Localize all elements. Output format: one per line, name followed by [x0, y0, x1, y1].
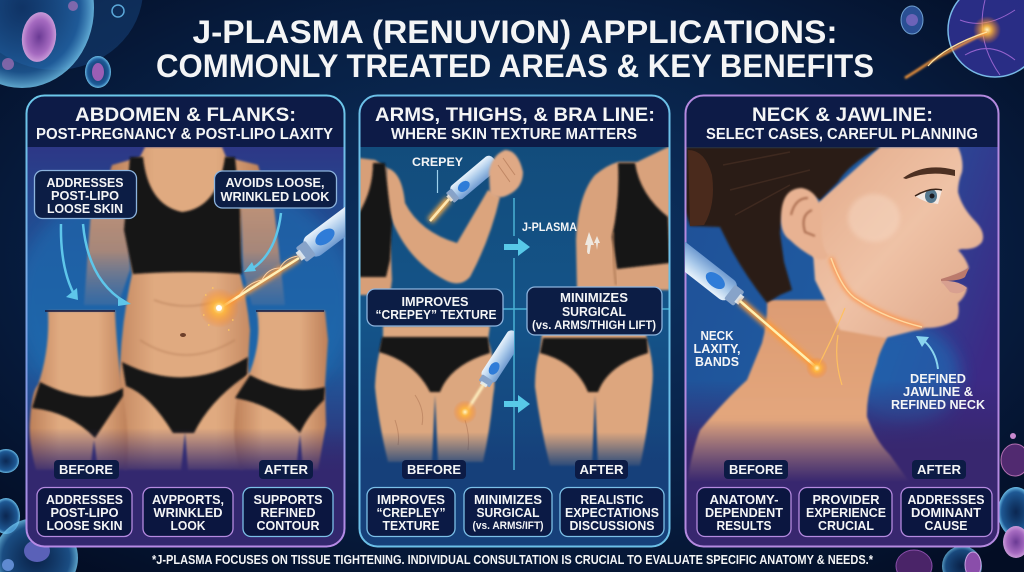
benefit: minimizes surgical: MINIMIZES: [474, 492, 542, 507]
after label: AFTER: [917, 462, 962, 477]
j-plasma label: J-PLASMA: [522, 222, 577, 234]
benefit: realistic expectations discussions: EXPECTATIONS: [565, 505, 659, 520]
title: J-PLASMA (RENUVION) APPLICATIONS:: [192, 14, 838, 50]
benefit: addresses dominant cause: CAUSE: [924, 518, 968, 533]
panel 1 heading: ABDOMEN & FLANKS:: [75, 104, 296, 126]
callout: addresses post-lipo loose skin: POST-LIPO: [51, 188, 119, 203]
callout: improves crepey texture: [367, 289, 503, 326]
benefit: minimizes surgical: [464, 488, 552, 536]
benefit: avpports wrinkled look: AVPPORTS,: [152, 492, 224, 507]
benefit: anatomy-dependent results: [697, 488, 791, 536]
benefit: provider experience crucial: EXPERIENCE: [806, 505, 886, 520]
callout: avoids loose wrinkled look: [214, 171, 336, 208]
callout: improves crepey texture: “CREPEY” TEXTURE: [376, 307, 497, 322]
decorative cells: top right with plasma flare: [901, 0, 1024, 78]
benefit: provider experience crucial: [799, 488, 892, 536]
before label: [402, 460, 466, 479]
title: COMMONLY TREATED AREAS & KEY BENEFITS: [156, 48, 874, 84]
panel 2 heading: ARMS, THIGHS, & BRA LINE:: [375, 104, 655, 126]
benefit: anatomy-dependent results: RESULTS: [716, 518, 772, 533]
after label: AFTER: [264, 462, 309, 477]
panel 3 heading: NECK & JAWLINE:: [752, 104, 933, 126]
callout: addresses post-lipo loose skin: ADDRESSES: [46, 175, 124, 190]
callout: improves crepey texture: IMPROVES: [402, 294, 469, 309]
panel 1 border: [26, 96, 344, 546]
benefit: addresses dominant cause: ADDRESSES: [908, 492, 985, 507]
panel: arms, thighs and bra line: [359, 95, 670, 547]
callout: minimizes surgical: [527, 287, 662, 335]
benefit: provider experience crucial: PROVIDER: [812, 492, 880, 507]
benefit: addresses dominant cause: DOMINANT: [911, 505, 981, 520]
up arrows on right arm: [585, 232, 600, 254]
defined jawline label: DEFINED: [910, 372, 966, 386]
benefit: realistic expectations discussions: DISCUSSIONS: [570, 518, 655, 533]
benefit: avpports wrinkled look: WRINKLED: [154, 505, 222, 520]
benefit: anatomy-dependent results: DEPENDENT: [705, 505, 783, 520]
icon: plasma wand with spark on abdomen: [200, 207, 345, 331]
benefit: avpports wrinkled look: LOOK: [170, 518, 206, 533]
after label: [912, 460, 966, 479]
arrow to jawline: [916, 336, 938, 369]
benefit: addresses dominant cause: [901, 488, 992, 536]
benefit: improves crepley texture: “CREPLEY”: [376, 505, 446, 520]
icon: wand on arm and fist: [430, 150, 523, 221]
benefit: provider experience crucial: CRUCIAL: [818, 518, 874, 533]
panel 1 illustration: [15, 95, 355, 547]
icon: wand on thigh: [454, 330, 514, 423]
panel 2 border: [360, 96, 670, 546]
panel 1 heading: POST-PREGNANCY & POST-LIPO LAXITY: [36, 126, 333, 143]
before label: BEFORE: [729, 462, 783, 477]
after label: [575, 460, 628, 479]
benefit: addresses post-lipo loose skin: ADDRESSES: [46, 492, 123, 507]
callout: avoids loose wrinkled look: AVOIDS LOOSE,: [226, 175, 324, 190]
panel 3 heading: SELECT CASES, CAREFUL PLANNING: [706, 126, 978, 143]
panel 1 heading: [36, 104, 333, 143]
before label: BEFORE: [59, 462, 113, 477]
panel 2 heading: WHERE SKIN TEXTURE MATTERS: [391, 126, 637, 143]
benefit: supports refined contour: REFINED: [260, 505, 316, 520]
callout: addresses post-lipo loose skin: [34, 170, 136, 218]
benefit: supports refined contour: [243, 488, 333, 536]
decorative cells: bottom left: [0, 449, 78, 572]
callout: addresses post-lipo loose skin: LOOSE SKIN: [47, 201, 123, 216]
benefit: addresses post-lipo loose skin: LOOSE SKIN: [46, 518, 122, 533]
callout: minimizes surgical: MINIMIZES: [560, 290, 628, 305]
neck laxity label: NECK: [700, 329, 734, 343]
before label: [54, 460, 119, 479]
benefit: improves crepley texture: TEXTURE: [382, 518, 440, 533]
callout: avoids loose wrinkled look: WRINKLED LOOK: [220, 189, 330, 204]
benefit: realistic expectations discussions: REALISTIC: [580, 492, 644, 507]
panel: abdomen and flanks: [26, 94, 346, 548]
before label: BEFORE: [407, 462, 461, 477]
after label: [259, 460, 313, 479]
panel 3 illustration: [685, 95, 999, 547]
panel 3 heading: [706, 104, 978, 143]
footer disclaimer: *J-PLASMA FOCUSES ON TISSUE TIGHTENING. INDIVIDUAL CONSULTATION IS CRUCIAL TO EVALUATE SPECIFIC ANATOMY & NEEDS.*: [152, 552, 874, 567]
panel 2 heading: [375, 104, 655, 143]
crepey label: CREPEY: [412, 155, 463, 169]
benefit: addresses post-lipo loose skin: [37, 488, 132, 536]
benefit: anatomy-dependent results: ANATOMY-: [710, 492, 778, 507]
benefit: minimizes surgical: (vs. ARMS/IFT): [472, 520, 544, 532]
neck laxity label: LAXITY,: [694, 342, 740, 356]
benefit: addresses post-lipo loose skin: POST-LIPO: [50, 505, 118, 520]
center divider with arrows: [503, 198, 670, 470]
benefit: minimizes surgical: SURGICAL: [476, 505, 540, 520]
benefit: supports refined contour: SUPPORTS: [254, 492, 323, 507]
benefit: supports refined contour: CONTOUR: [256, 518, 320, 533]
decorative cells: top left: [0, 0, 143, 88]
callout: minimizes surgical: SURGICAL: [562, 304, 626, 319]
panel 2 illustration: [359, 95, 670, 547]
glowing jawline and neck bands: [815, 258, 922, 385]
icon: wand on neck with beam: [685, 242, 827, 378]
benefit: avpports wrinkled look: [143, 488, 233, 536]
panel 3 border: [686, 96, 998, 546]
defined jawline label: REFINED NECK: [891, 398, 985, 412]
decorative cells: bottom right: [896, 433, 1024, 572]
benefit: improves crepley texture: [367, 488, 455, 536]
before label: [724, 460, 788, 479]
benefit: improves crepley texture: IMPROVES: [377, 492, 445, 507]
panel: neck and jawline: [654, 95, 999, 547]
benefit: realistic expectations discussions: [560, 488, 664, 536]
neck laxity label: [694, 329, 740, 369]
after label: AFTER: [580, 462, 624, 477]
crepey label: [412, 155, 463, 193]
arrows pointing at arms and waist: [61, 213, 281, 306]
title: [156, 14, 874, 84]
callout: minimizes surgical: (vs. ARMS/THIGH LIFT): [532, 318, 656, 332]
defined jawline label: JAWLINE &: [903, 385, 973, 399]
neck laxity label: BANDS: [695, 355, 739, 369]
defined jawline label: [891, 372, 985, 412]
